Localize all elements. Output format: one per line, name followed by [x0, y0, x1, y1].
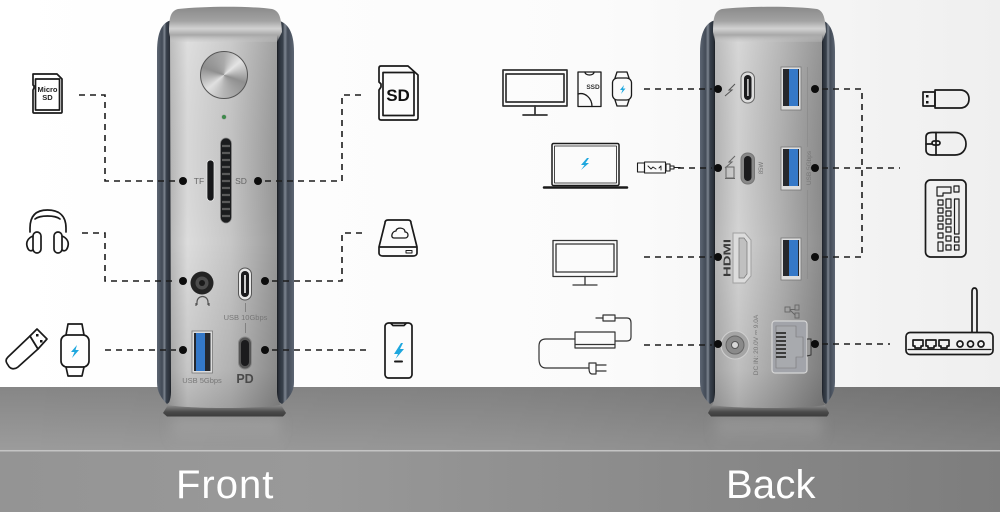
DC input port — [721, 331, 749, 359]
headphone symbol — [196, 296, 209, 306]
connector lines: front — [79, 95, 367, 350]
power button — [200, 51, 248, 99]
icon: smartwatch charging — [61, 324, 89, 376]
callout dots: front — [179, 177, 269, 354]
label: TF: TF — [194, 176, 204, 186]
connector lines and label: USB 10Gbps — [224, 303, 268, 333]
USB-C port: 10Gbps — [238, 268, 252, 300]
icon: power adapter — [539, 315, 631, 374]
icon: smartphone charging — [385, 323, 412, 378]
USB-A port: 5Gbps — [192, 331, 212, 373]
icon: laptop charging — [544, 144, 627, 188]
icon: keyboard — [926, 180, 966, 257]
left side band — [157, 20, 172, 404]
icon: SSD: SSD — [586, 84, 600, 91]
label: DC input rating: DC IN: 20.0V ⎓ 9.0A — [753, 314, 760, 375]
HDMI inner slot — [739, 238, 747, 278]
USB-A port 3 — [781, 238, 801, 280]
front face — [163, 30, 286, 416]
base foot — [708, 405, 829, 416]
label: USB 5Gbps: USB 5Gbps — [182, 376, 222, 385]
left side band — [700, 20, 716, 404]
base foot — [163, 405, 286, 416]
icon: Thunderbolt cable — [638, 162, 680, 173]
device: front view — [157, 7, 294, 416]
icon: watch with bolt — [612, 72, 632, 106]
heading: Front: Front — [176, 463, 274, 507]
callout dots: back — [714, 85, 819, 348]
icon: SD card: SD — [386, 86, 410, 105]
Thunderbolt symbol — [725, 84, 735, 96]
Thunderbolt USB-C port — [741, 72, 754, 103]
connector lines: back — [644, 89, 900, 345]
icon: mouse — [926, 132, 966, 155]
label: PD: PD — [236, 372, 254, 386]
icon: micro SD card: Micro — [37, 85, 58, 94]
shelf — [0, 387, 1000, 512]
USB 5Gbps bracket label: USB 5Gbps — [806, 150, 813, 185]
label: HDMI: HDMI — [722, 239, 734, 277]
label: 85W: 85W — [759, 161, 765, 174]
icon: cloud hard drive — [379, 220, 417, 256]
HDMI port — [733, 233, 751, 283]
SD slot — [220, 138, 232, 223]
LED — [222, 115, 226, 119]
background wall — [0, 0, 1000, 388]
Thunderbolt USB-C host port — [741, 153, 754, 184]
back face — [708, 30, 829, 416]
icon: headphones — [27, 210, 68, 253]
connector lines and label: USB 10Gbps: USB 10Gbps — [224, 313, 268, 322]
device: back view — [700, 7, 835, 416]
Ethernet port — [772, 321, 811, 373]
right side band — [821, 20, 835, 404]
icon: micro SD card: SD — [42, 93, 53, 102]
TF slot — [207, 160, 214, 201]
icon: micro SD card — [33, 74, 62, 113]
icon: USB flash drive — [6, 329, 47, 369]
laptop and Thunderbolt symbols — [725, 156, 735, 178]
label: SD: SD — [235, 176, 247, 186]
icon: SSD — [578, 72, 601, 106]
top cap — [713, 7, 826, 42]
USB-A port 2 — [781, 147, 801, 190]
headphone jack — [190, 272, 214, 294]
heading: Back: Back — [726, 463, 817, 507]
icon: USB stick — [923, 90, 969, 108]
icon: monitor — [553, 240, 617, 285]
right side band — [276, 20, 294, 404]
USB-A port 1 — [781, 67, 801, 110]
top cap — [169, 7, 282, 42]
USB-C port: PD — [238, 337, 252, 369]
icon: monitor — [503, 70, 567, 115]
network symbol — [785, 305, 799, 318]
icon: SD card — [379, 66, 418, 120]
icon: router — [906, 288, 993, 354]
